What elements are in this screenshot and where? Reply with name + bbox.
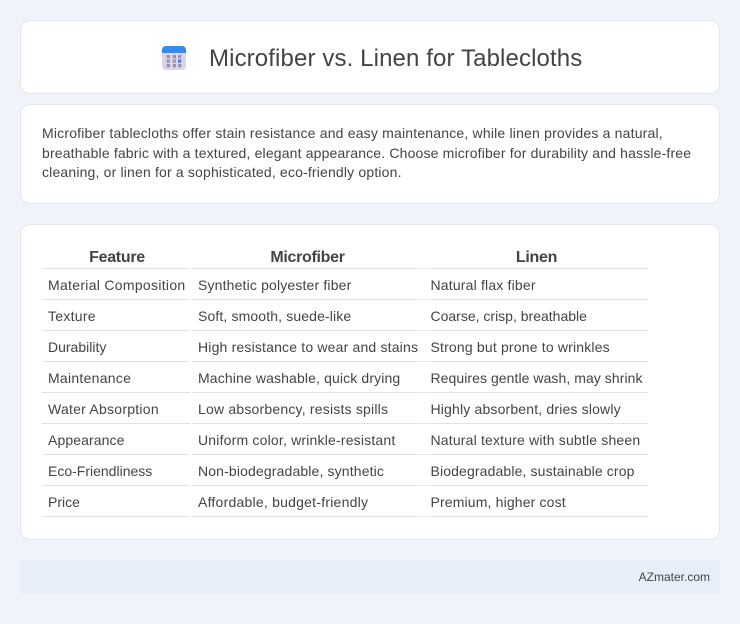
comparison table: Feature	[89, 249, 145, 266]
intro text	[42, 125, 691, 180]
comparison table: Low absorbency, resists spills	[198, 401, 388, 417]
comparison table: Natural texture with subtle sheen	[430, 432, 640, 448]
comparison table: Biodegradable, sustainable crop	[430, 463, 635, 479]
footer bar	[20, 560, 720, 594]
comparison table: Requires gentle wash, may shrink	[430, 370, 643, 386]
comparison table: High resistance to wear and stains	[198, 339, 418, 355]
comparison table	[42, 249, 648, 517]
comparison table: Coarse, crisp, breathable	[430, 308, 587, 324]
comparison table: Affordable, budget-friendly	[198, 494, 368, 510]
comparison table: Appearance	[48, 432, 125, 448]
comparison table: Durability	[48, 339, 106, 355]
comparison table: Microfiber	[270, 249, 345, 266]
comparison table: Synthetic polyester fiber	[198, 277, 351, 293]
intro text: breathable fabric with a textured, elegant appearance. Choose microfiber for durability and hassle-free	[42, 145, 691, 161]
title: Microfiber vs. Linen for Tablecloths	[209, 45, 582, 72]
comparison table: Strong but prone to wrinkles	[430, 339, 610, 355]
comparison table: Maintenance	[48, 370, 131, 386]
intro card	[20, 104, 720, 204]
footer credit: AZmater.com	[639, 570, 710, 584]
comparison table: Premium, higher cost	[430, 494, 566, 510]
table card	[20, 224, 720, 540]
intro text: Microfiber tablecloths offer stain resistance and easy maintenance, while linen provides a natural,	[42, 125, 663, 141]
comparison table: Natural flax fiber	[430, 277, 536, 293]
icon: calendar	[162, 46, 186, 70]
comparison table: Soft, smooth, suede-like	[198, 308, 351, 324]
comparison table: Eco-Friendliness	[48, 463, 152, 479]
title card	[20, 20, 720, 94]
comparison table: Texture	[48, 308, 96, 324]
comparison table: Highly absorbent, dries slowly	[430, 401, 621, 417]
comparison table: Linen	[516, 249, 557, 266]
comparison table: Material Composition	[48, 277, 186, 293]
comparison table: Water Absorption	[48, 401, 159, 417]
comparison table: Uniform color, wrinkle-resistant	[198, 432, 395, 448]
comparison table: Machine washable, quick drying	[198, 370, 400, 386]
comparison table: Non-biodegradable, synthetic	[198, 463, 384, 479]
intro text: cleaning, or linen for a sophisticated, eco-friendly option.	[42, 164, 402, 180]
comparison table: Price	[48, 494, 80, 510]
